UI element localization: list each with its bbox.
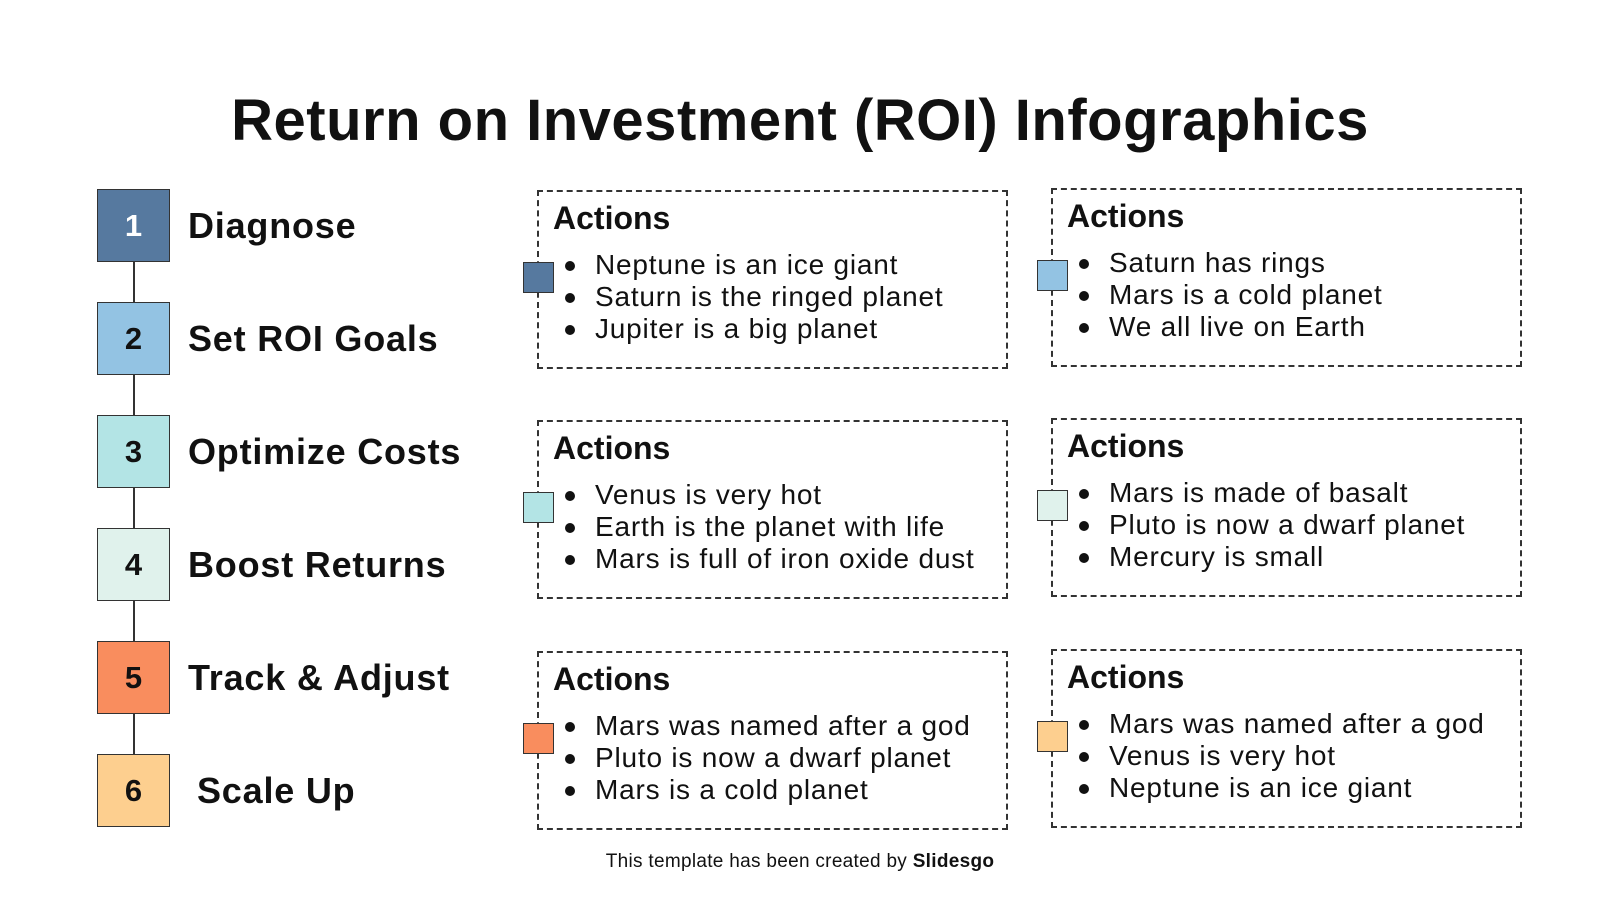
panel: actions 6: Venus is very hot (1109, 740, 1336, 771)
panel: actions 5: Mars is a cold planet (595, 774, 869, 805)
panel: actions 2: Mars is a cold planet (1109, 279, 1383, 310)
panel: actions 5: Actions (553, 661, 670, 697)
panel: actions 4 (1051, 418, 1522, 597)
step 4: 4 (125, 546, 142, 582)
step 4 (97, 528, 170, 601)
label 4: Boost Returns (188, 544, 446, 585)
panel: actions 3: Actions (553, 430, 670, 466)
panel: actions 5: Pluto is now a dwarf planet (595, 742, 951, 773)
step 1 (97, 189, 170, 262)
panel: actions 3: Mars is full of iron oxide dust (595, 543, 975, 574)
panel: actions 2: Saturn has rings (1109, 247, 1326, 278)
panel: actions 4: Mars is made of basalt (1109, 477, 1408, 508)
step 3: 3 (125, 434, 142, 468)
step 2: 2 (125, 320, 142, 356)
panel: actions 4: Pluto is now a dwarf planet (1109, 509, 1465, 540)
panel: actions 2: Actions (1067, 198, 1184, 234)
title: Return on Investment (ROI) Infographics (231, 88, 1369, 153)
panel: actions 1: Actions (553, 200, 670, 236)
panel: actions 6: Mars was named after a god (1109, 708, 1485, 739)
label 2: Set ROI Goals (188, 318, 438, 359)
panel: actions 3 (537, 420, 1008, 599)
panel: actions 3: Venus is very hot (595, 479, 822, 510)
step 6: 6 (125, 772, 142, 808)
label 3: Optimize Costs (188, 431, 461, 472)
step 2 (97, 302, 170, 375)
panel: actions 1 (537, 190, 1008, 369)
step 5 (97, 641, 170, 714)
step 3 (97, 415, 170, 488)
panel: actions 3: Earth is the planet with life (595, 511, 945, 542)
panel: actions 1: Jupiter is a big planet (595, 313, 878, 344)
label 5: Track & Adjust (188, 657, 450, 698)
label 6: Scale Up (197, 770, 355, 811)
panel: actions 6 (1051, 649, 1522, 828)
panel: actions 4: Actions (1067, 428, 1184, 464)
panel: actions 6: Neptune is an ice giant (1109, 772, 1412, 803)
panel: actions 5 (537, 651, 1008, 830)
step 6 (97, 754, 170, 827)
panel: actions 5: Mars was named after a god (595, 710, 971, 741)
panel: actions 6: Actions (1067, 659, 1184, 695)
panel: actions 4: Mercury is small (1109, 541, 1324, 572)
panel: actions 2: We all live on Earth (1109, 311, 1366, 342)
label 1: Diagnose (188, 205, 356, 246)
panel: actions 1: Neptune is an ice giant (595, 249, 898, 280)
panel: actions 2 (1051, 188, 1522, 367)
step 1: 1 (125, 208, 142, 242)
connector line (133, 260, 134, 760)
panel: actions 1: Saturn is the ringed planet (595, 281, 943, 312)
footer: This template has been created by Slidesgo (606, 851, 994, 872)
step 5: 5 (125, 660, 142, 694)
